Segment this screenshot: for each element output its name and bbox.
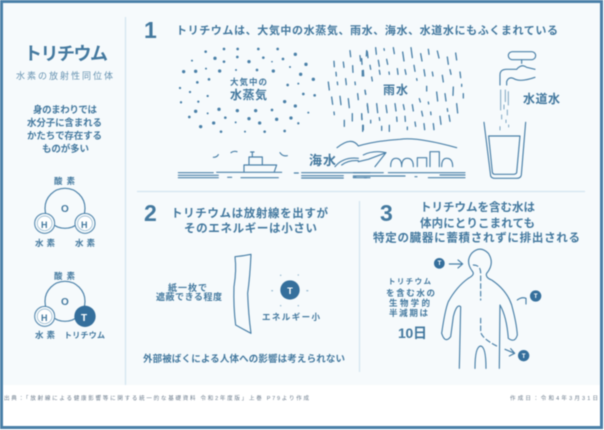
label: shielded by one sheet of paper: 紙一枚で — [168, 282, 207, 293]
water molecule diagram: O — [61, 204, 69, 215]
water molecule diagram — [35, 176, 95, 248]
label: shielded by one sheet of paper: 遮蔽できる程度 — [156, 291, 222, 302]
human body diagram — [434, 249, 541, 368]
biological half-life label — [386, 277, 435, 341]
rain strokes — [328, 51, 368, 130]
label: water vapour: 水蒸気 — [230, 87, 267, 102]
tritiated water molecule diagram: H — [41, 313, 48, 323]
water molecule diagram: 酸素 — [54, 176, 75, 186]
panel 1: where tritium exists — [144, 17, 560, 178]
heading 3: 体内にとりこまれても — [420, 216, 535, 230]
heading 2: トリチウムは放射線を出すが — [171, 206, 328, 220]
label: rain: 雨水 — [383, 82, 408, 97]
biological half-life label: 生物学的 — [389, 298, 430, 308]
left panel: tritium overview — [16, 44, 113, 340]
tritiated water molecule diagram: O — [61, 297, 69, 308]
mountains, river and town — [335, 139, 465, 178]
created date: 作成日：令和4年3月31日 — [510, 394, 598, 402]
tritium energy icon: T — [287, 286, 293, 296]
water molecule diagram: H — [41, 220, 48, 230]
description text: かたちで存在する — [27, 130, 102, 142]
biological half-life label: を含む水の — [386, 288, 435, 298]
description text: 身のまわりでは — [33, 104, 97, 116]
heading 3: トリチウムを含む水は — [420, 200, 536, 214]
panel 3: excretion from body: T — [438, 261, 442, 267]
panel 3: excretion from body: T — [534, 294, 538, 300]
label: shielded by one sheet of paper — [156, 282, 222, 302]
source note: 出典：「放射線による健康影響等に関する統一的な基礎資料 令和2年度版」上巻 P79より作成 — [4, 394, 309, 402]
heading 3 — [373, 200, 580, 244]
arrow: intake — [434, 258, 463, 269]
heading 2 — [171, 206, 328, 235]
water vapour dots — [179, 48, 316, 133]
biological half-life label: 半減期は — [389, 308, 428, 318]
note: external exposure: 外部被ばくによる人体への影響は考えられない — [143, 353, 345, 365]
tritium energy icon — [262, 274, 320, 322]
arrow: exhaled — [517, 290, 541, 304]
description text — [27, 104, 102, 155]
description text: ものが多い — [42, 143, 89, 155]
glass of water — [484, 122, 526, 178]
tritiated water molecule diagram: トリチウム — [64, 331, 105, 340]
arrow: excreted — [505, 349, 529, 361]
label: sea water: 海水 — [309, 153, 336, 168]
biological half-life label: トリチウム — [388, 277, 432, 286]
faucet icon — [500, 52, 536, 130]
tritiated water molecule diagram: T — [81, 313, 87, 324]
label: water vapour: 大気中の — [230, 77, 267, 87]
paper sheet icon — [234, 254, 251, 333]
section number 3: 3 — [380, 200, 393, 226]
water molecule diagram: 水素 — [75, 238, 95, 248]
tritiated water molecule diagram: 酸素 — [54, 271, 75, 281]
heading 2: そのエネルギーは小さい — [184, 222, 317, 235]
panel 2: low energy radiation — [143, 200, 345, 365]
panel 3: excretion from body: T — [522, 354, 526, 360]
tritiated water molecule diagram: 水素 — [35, 330, 55, 340]
label: tap water: 水道水 — [523, 91, 560, 106]
panel 3: excretion from body — [373, 200, 580, 368]
sea: ship and waves — [178, 151, 370, 178]
label: water vapour — [230, 77, 267, 102]
subtitle: 水素の放射性同位体 — [16, 70, 113, 81]
tritium energy icon: エネルギー小 — [262, 312, 320, 322]
water molecule diagram: H — [81, 220, 88, 230]
section number 2: 2 — [144, 200, 157, 226]
title: トリチウム — [24, 44, 108, 64]
water molecule diagram: 水素 — [35, 238, 55, 248]
tritiated water molecule diagram — [35, 271, 105, 340]
section number 1: 1 — [144, 17, 157, 43]
heading 1: トリチウムは、大気中の水蒸気、雨水、海水、水道水にもふくまれている — [176, 23, 558, 37]
description text: 水分子に含まれる — [27, 117, 102, 129]
biological half-life label: 10日 — [398, 325, 427, 341]
heading 3: 特定の臓器に蓄積されずに排出される — [373, 230, 580, 244]
